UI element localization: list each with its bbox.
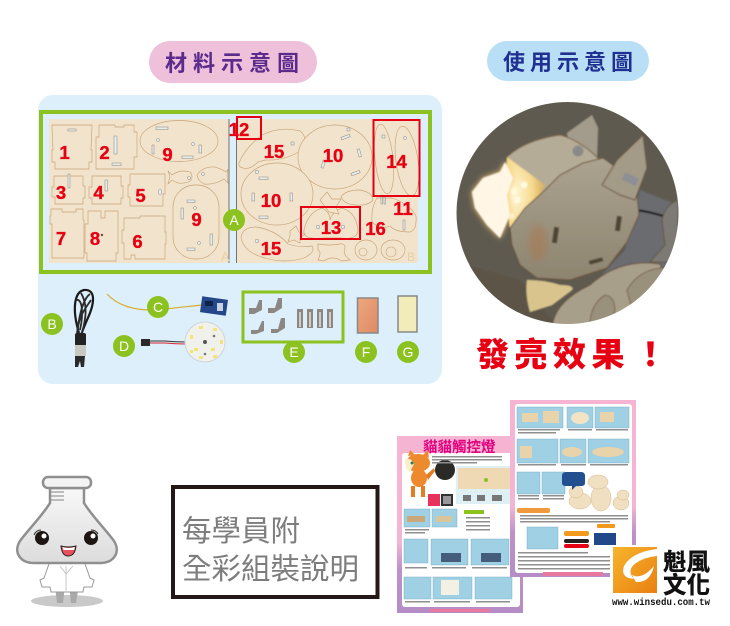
heading: usage diagram: [487, 41, 649, 81]
label F: F: [362, 344, 370, 360]
wood sheet A: A: [221, 249, 230, 264]
orange cat illustration: [405, 450, 435, 497]
label A: [223, 209, 245, 231]
callout: included full-colour assembly guide: 每學員附: [182, 515, 300, 548]
copper foil F: [358, 298, 378, 333]
body plate: [552, 262, 662, 324]
wood sheet B: B: [407, 250, 415, 264]
rear ear: [567, 115, 598, 158]
part numbers: 5: [135, 185, 146, 206]
screw: [572, 146, 584, 156]
label F: [355, 341, 377, 363]
lab coat: [40, 561, 94, 592]
caption: lighting effect: 發亮效果: [476, 336, 630, 373]
reddish LED reflection: [529, 225, 547, 261]
label D: D: [119, 338, 129, 354]
intro text lines: [432, 456, 502, 464]
heading: usage diagram: 使用示意圖: [503, 50, 638, 75]
red highlight box 12: [237, 117, 261, 139]
LEDs: [508, 181, 528, 220]
photo: glowing cat lamp: [456, 102, 678, 324]
measuring lines: [51, 492, 64, 500]
callout: included full-colour assembly guide: [173, 487, 378, 597]
cats illustration: [569, 475, 629, 511]
part numbers: 9: [191, 209, 202, 230]
rear cat edge: [650, 200, 678, 262]
section label: [517, 508, 550, 513]
guide title: 貓貓觸控燈: [423, 438, 496, 456]
part numbers: 9: [162, 144, 173, 165]
caption lines: [405, 529, 510, 602]
heading: materials diagram: 材料示意圖: [165, 51, 305, 76]
slots: [552, 216, 622, 265]
speech bubble: [562, 472, 585, 490]
part numbers: 12: [229, 119, 249, 140]
logo: Winsdom Culture: 魁風: [663, 548, 710, 575]
red highlight box 14: [374, 120, 420, 196]
screws and brackets E: [243, 292, 343, 342]
glowing white diffuser: [472, 162, 513, 238]
logo: Winsdom Culture: www.winsedu.com.tw: [612, 597, 711, 609]
part numbers: 13: [321, 217, 341, 238]
callout: included full-colour assembly guide: 全彩組裝說明: [182, 553, 359, 586]
part numbers: 1: [59, 142, 70, 163]
label C: [147, 296, 169, 318]
logo: Winsdom Culture: 文化: [663, 571, 710, 598]
logo: Winsdom Culture: [610, 545, 720, 609]
parts list: [464, 510, 490, 530]
label D: [113, 335, 135, 357]
QR area: [428, 494, 453, 506]
label A: A: [229, 212, 239, 228]
mouth: [61, 546, 76, 556]
part numbers: 15: [261, 238, 281, 259]
green frame around wood sheets: [41, 112, 430, 272]
part numbers: 2: [99, 142, 110, 163]
footer strip: [543, 572, 603, 576]
mascot: flask character: [17, 477, 117, 607]
label E: [283, 341, 305, 363]
touch sensor C: [107, 294, 228, 316]
step photos: [517, 407, 629, 494]
part numbers: 10: [261, 190, 281, 211]
label G: G: [403, 344, 413, 360]
part numbers: 4: [93, 182, 104, 203]
LED board D: [141, 322, 225, 362]
part numbers: 15: [264, 141, 284, 162]
flask rim: [43, 477, 91, 488]
guide sheet: front page: [397, 436, 523, 613]
diffuser paper G: [398, 296, 417, 332]
lit LED interior: [506, 156, 546, 228]
part numbers: 7: [56, 228, 66, 249]
wiring labels: [564, 524, 615, 548]
lamp photo thumbnail: [435, 460, 455, 480]
circuit board: [594, 533, 616, 545]
black cord: [635, 210, 680, 222]
parts thumbnail: [456, 466, 521, 504]
step photos: [404, 509, 512, 599]
rear head plate: [507, 135, 600, 200]
heading: materials diagram: [149, 41, 317, 83]
label E: E: [289, 344, 299, 360]
wiring photo: [527, 527, 558, 549]
USB cable B: [75, 290, 93, 367]
part numbers: 8: [90, 228, 100, 249]
main head plate: [510, 158, 639, 280]
part numbers: 3: [56, 182, 66, 203]
part numbers: 14: [386, 151, 407, 172]
label C: C: [153, 299, 163, 315]
logo mark: [613, 547, 657, 593]
right ear with screw: [602, 135, 647, 200]
part numbers: 10: [323, 145, 343, 166]
footer strip: [430, 609, 490, 612]
shadow: [31, 595, 103, 607]
part numbers: 6: [132, 231, 143, 252]
caption: lighting effect: ！: [634, 336, 667, 373]
label G: [397, 341, 419, 363]
left eye: [34, 530, 49, 545]
wood sheet B: [236, 119, 423, 264]
panel: materials: [38, 95, 442, 384]
caption text lines: [518, 429, 628, 570]
red highlight box 13: [301, 207, 360, 239]
right eye: [84, 530, 98, 545]
part numbers: 16: [365, 218, 386, 239]
warm halo around diffuser: [472, 162, 513, 238]
label B: B: [47, 316, 57, 332]
guide sheet: back page: [510, 400, 636, 577]
label B: [41, 313, 63, 335]
wood sheet A: [49, 119, 230, 264]
part numbers: 11: [393, 198, 413, 219]
part numbers: [56, 119, 413, 259]
legs: [55, 585, 79, 603]
flask body: [17, 488, 117, 563]
lower neck: [526, 280, 572, 312]
